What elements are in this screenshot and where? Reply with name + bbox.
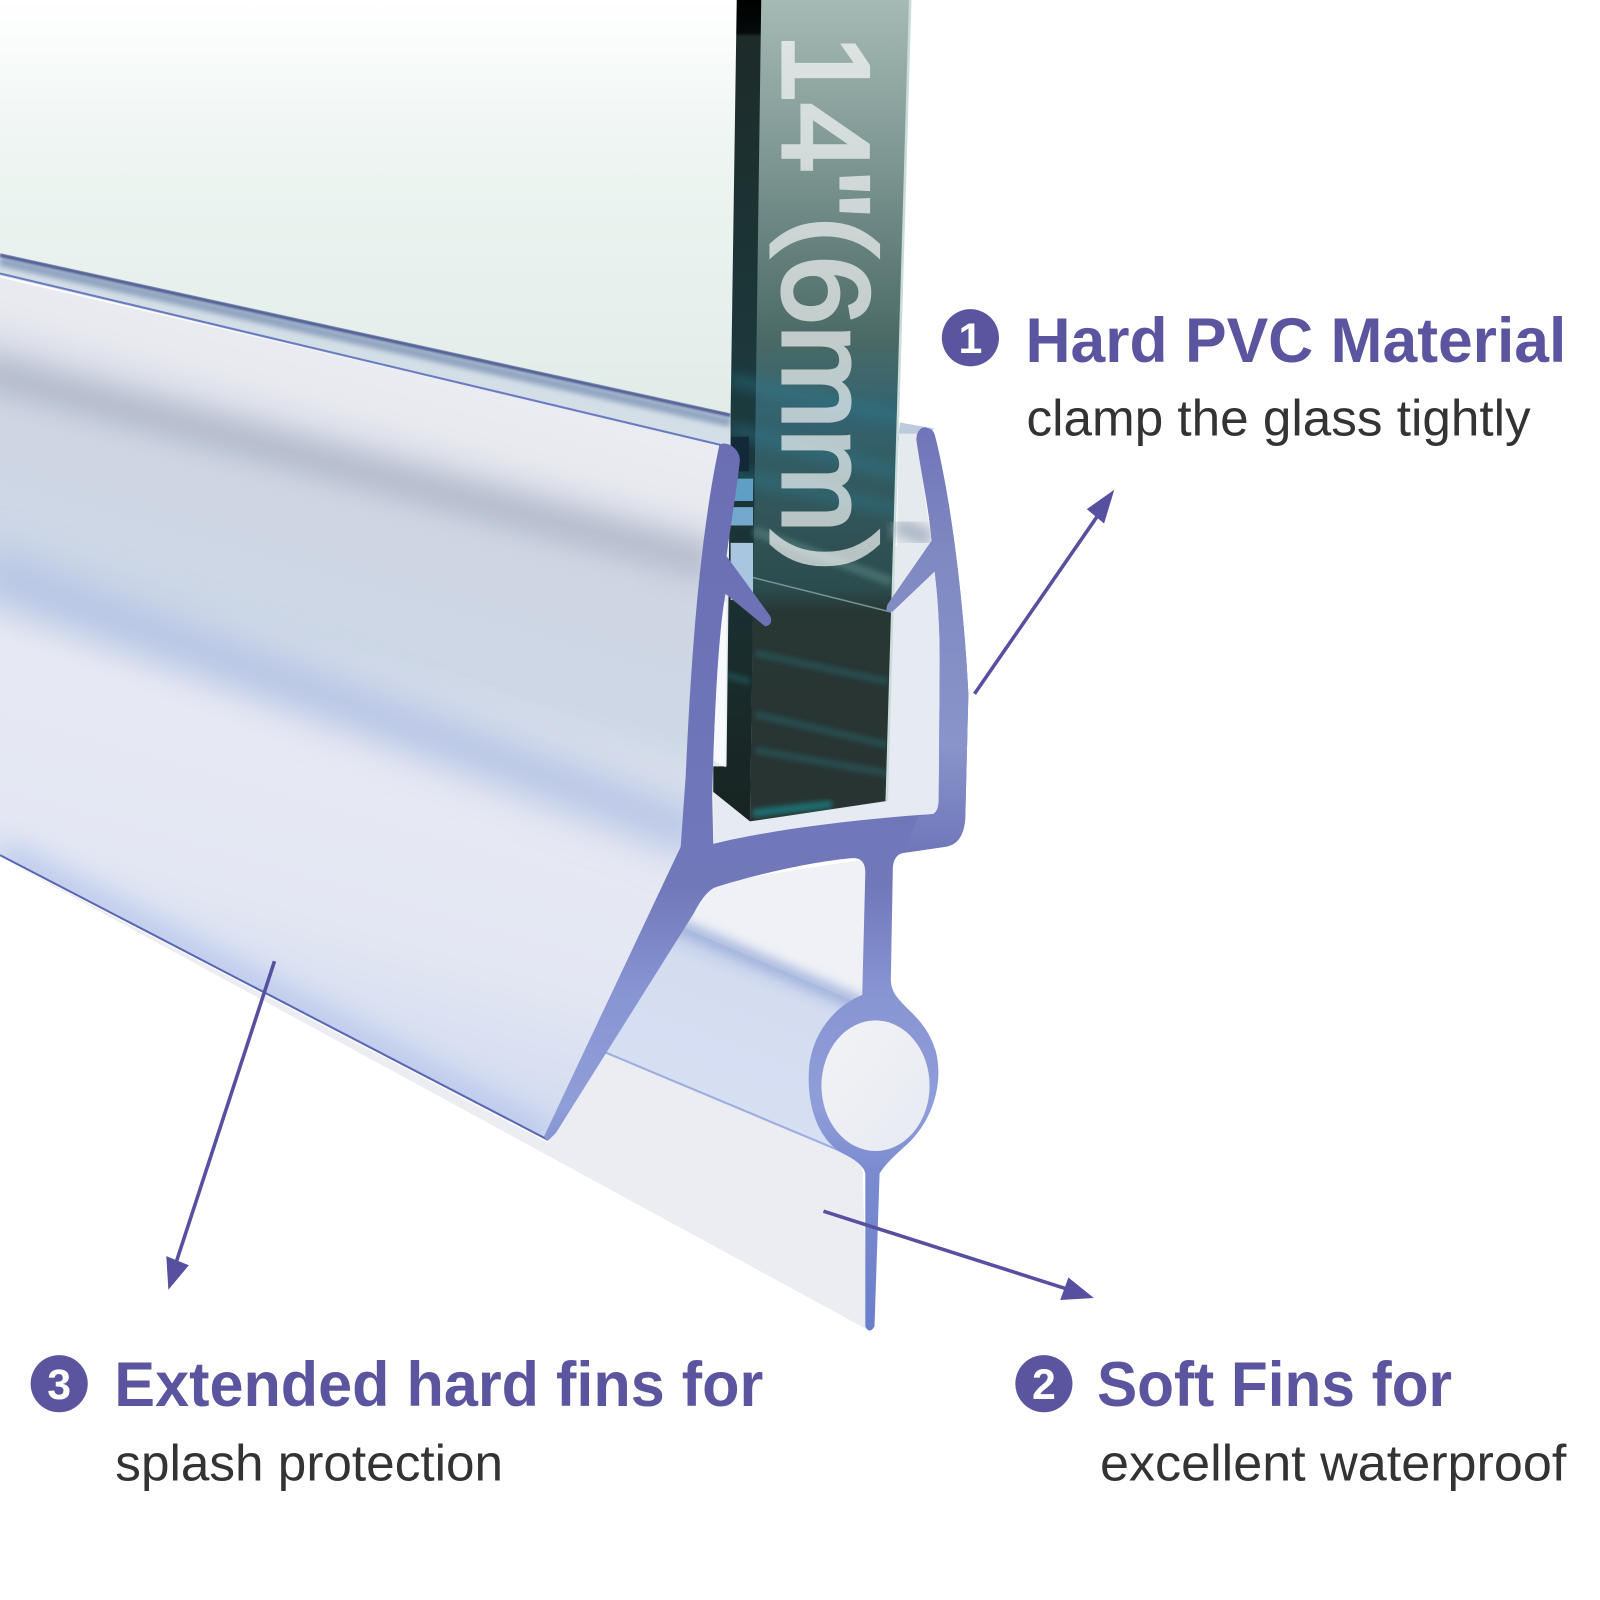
arrow: hard PVC material [974,490,1114,694]
tube body [602,923,878,1158]
space above tube [673,859,865,1005]
number badge 2 [1015,1355,1072,1412]
description 2: excellent waterproof [1100,1435,1567,1492]
illustration: shower seal on glass panel [0,0,968,1331]
callout 3: extended hard fins [31,1350,763,1492]
number badge 1: 1 [958,315,982,363]
number badge 3 [31,1355,88,1412]
fin shading bands [0,369,714,1140]
arrow: extended hard fins [166,961,274,1290]
fin bottom edge line [0,855,548,1140]
wall shadow [896,526,931,539]
glass teal edge face [750,0,910,821]
number badge 1 [942,309,999,366]
callout 1: hard PVC material [942,306,1566,447]
rail lower line [0,273,720,445]
thickness label on glass: 6mm [758,255,895,533]
tube highlight lines [668,921,863,1005]
main hard fin face [0,278,720,1140]
callout 2: soft fins [1015,1350,1567,1492]
right side of channel wall [896,422,935,602]
number badge 3: 3 [47,1361,71,1409]
heading 2: Soft Fins for [1097,1350,1452,1420]
glass light edge [887,0,910,801]
fin base fill [0,278,720,1140]
number badge 2: 2 [1032,1361,1056,1409]
description 1: clamp the glass tightly [1027,390,1531,447]
channel interior [713,546,941,847]
glass front face [0,0,738,413]
tube and rear fin [602,859,878,1158]
description 3: splash protection [115,1435,503,1492]
lower soft fin sheet [0,857,867,1330]
thickness label on glass: ) [770,533,897,571]
translucent wall above barb [896,434,933,602]
heading 3: Extended hard fins for [114,1350,763,1420]
heading 1: Hard PVC Material [1026,306,1566,376]
left window in channel [713,602,727,767]
profile body [544,427,968,1331]
glass edge reflections [719,380,902,813]
top rail of seal [0,253,731,449]
bubble opening [821,1020,930,1151]
tube lower edge [602,1051,855,1157]
thickness label on glass: 14" [758,34,895,213]
rail shading [0,255,731,422]
rail body [0,253,731,449]
top lip [898,422,935,441]
arrow: soft fins [823,1211,1094,1300]
glass edge [713,0,910,821]
right wall shade [886,427,968,853]
thickness label on glass: ( [770,217,897,255]
glass dark side strip [713,0,762,821]
seal cross-section profile [544,427,968,1331]
